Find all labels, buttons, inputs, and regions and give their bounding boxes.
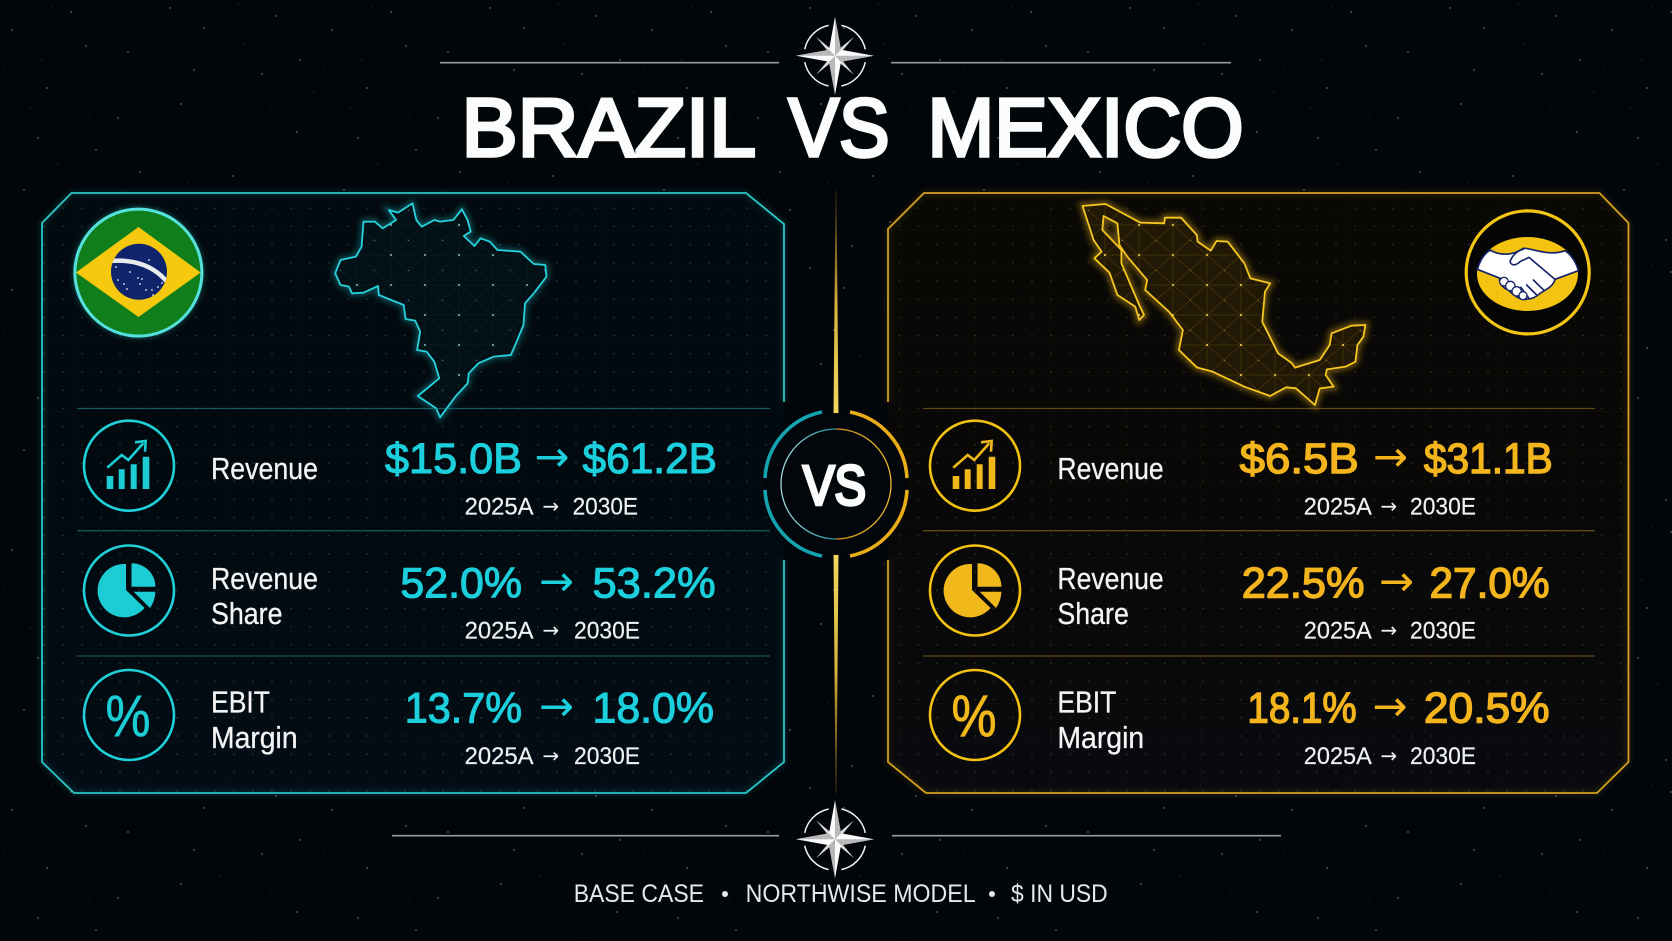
values: 52.0%: [400, 560, 522, 608]
values: $15.0B: [385, 435, 522, 483]
label: [1057, 685, 1144, 755]
icon: percent: [84, 670, 174, 760]
period: [465, 743, 640, 770]
values: 18.0%: [592, 685, 714, 733]
icon: handshake logo: [1466, 211, 1589, 334]
values: [1242, 557, 1550, 608]
values: [405, 682, 714, 733]
footer text: BASE CASE: [574, 880, 704, 908]
icon: percent: [930, 670, 1020, 760]
values: [1240, 432, 1553, 483]
label: Share: [211, 596, 282, 631]
dividers: [77, 408, 770, 656]
row: Brazil revenue: [84, 421, 717, 520]
values: $61.2B: [582, 435, 717, 483]
period: 2025A: [465, 617, 534, 644]
panel: Brazil: [42, 193, 784, 793]
icon: growth chart: [930, 421, 1020, 511]
row: Mexico EBIT margin: [930, 670, 1550, 770]
period: →: [542, 618, 559, 642]
period: 2030E: [574, 743, 640, 770]
icon: Brazil flag: [73, 208, 203, 338]
bottom ornament: lines and compass: [392, 800, 1281, 878]
period: [1304, 743, 1476, 770]
label: Share: [1057, 596, 1129, 631]
values: →: [539, 682, 574, 731]
title: [462, 81, 1244, 174]
icon: pie chart: [930, 546, 1020, 636]
title: VS: [788, 81, 890, 174]
label: Revenue: [211, 561, 318, 596]
period: →: [542, 494, 559, 518]
label: Margin: [1057, 720, 1144, 755]
title: MEXICO: [928, 81, 1244, 174]
icon: growth chart: [84, 421, 174, 511]
values: →: [539, 557, 574, 606]
row: Mexico revenue share: [930, 546, 1550, 644]
values: [400, 557, 716, 608]
values: →: [1379, 557, 1414, 606]
period: 2030E: [1410, 617, 1476, 644]
row: Brazil EBIT margin: [84, 670, 714, 770]
footer text: [574, 880, 1108, 908]
icon: percent: %: [106, 684, 150, 749]
values: 20.5%: [1424, 685, 1550, 733]
values: →: [1373, 432, 1408, 481]
label: [211, 685, 298, 755]
map: Brazil: [330, 200, 560, 420]
period: 2030E: [573, 493, 638, 520]
label: Margin: [211, 720, 298, 755]
period: 2025A: [465, 493, 534, 520]
values: 27.0%: [1430, 560, 1550, 608]
panel: Mexico: [888, 193, 1630, 793]
values: 18.1%: [1247, 685, 1357, 733]
row: Mexico revenue: [930, 421, 1553, 520]
period: →: [1380, 744, 1397, 768]
top ornament: lines and compass: [440, 17, 1231, 95]
title: BRAZIL: [462, 81, 756, 174]
period: 2025A: [1304, 743, 1372, 770]
values: 53.2%: [592, 560, 716, 608]
period: 2025A: [465, 743, 534, 770]
period: →: [1380, 618, 1397, 642]
values: [385, 432, 717, 483]
icon: pie chart: [84, 546, 174, 636]
row: Brazil revenue share: [84, 546, 716, 644]
values: 13.7%: [405, 685, 522, 733]
period: [1304, 493, 1476, 520]
values: $31.1B: [1424, 435, 1553, 483]
footer text: NORTHWISE MODEL: [746, 880, 976, 908]
center divider line: [834, 190, 838, 793]
period: 2030E: [1410, 493, 1476, 520]
period: [465, 493, 638, 520]
VS badge: [765, 412, 907, 556]
values: →: [534, 432, 570, 481]
label: Revenue: [1057, 451, 1164, 486]
footer text: $ IN USD: [1011, 880, 1108, 908]
values: [1247, 682, 1550, 733]
label: Revenue: [211, 451, 318, 486]
period: →: [542, 744, 559, 768]
label: [1057, 561, 1164, 631]
label: Revenue: [1057, 561, 1164, 596]
values: →: [1372, 682, 1408, 731]
period: →: [1380, 494, 1397, 518]
label: [211, 561, 318, 631]
period: [1304, 617, 1476, 644]
values: $6.5B: [1240, 435, 1359, 483]
map: Mexico: [1070, 200, 1380, 415]
period: 2030E: [1410, 743, 1476, 770]
dividers: [923, 408, 1595, 656]
period: 2025A: [1304, 617, 1372, 644]
period: 2030E: [574, 617, 640, 644]
period: 2025A: [1304, 493, 1372, 520]
values: 22.5%: [1242, 560, 1364, 608]
icon: percent: %: [952, 684, 996, 749]
label: EBIT: [1057, 685, 1116, 720]
period: [465, 617, 640, 644]
VS badge: VS: [803, 454, 866, 516]
label: EBIT: [211, 685, 270, 720]
